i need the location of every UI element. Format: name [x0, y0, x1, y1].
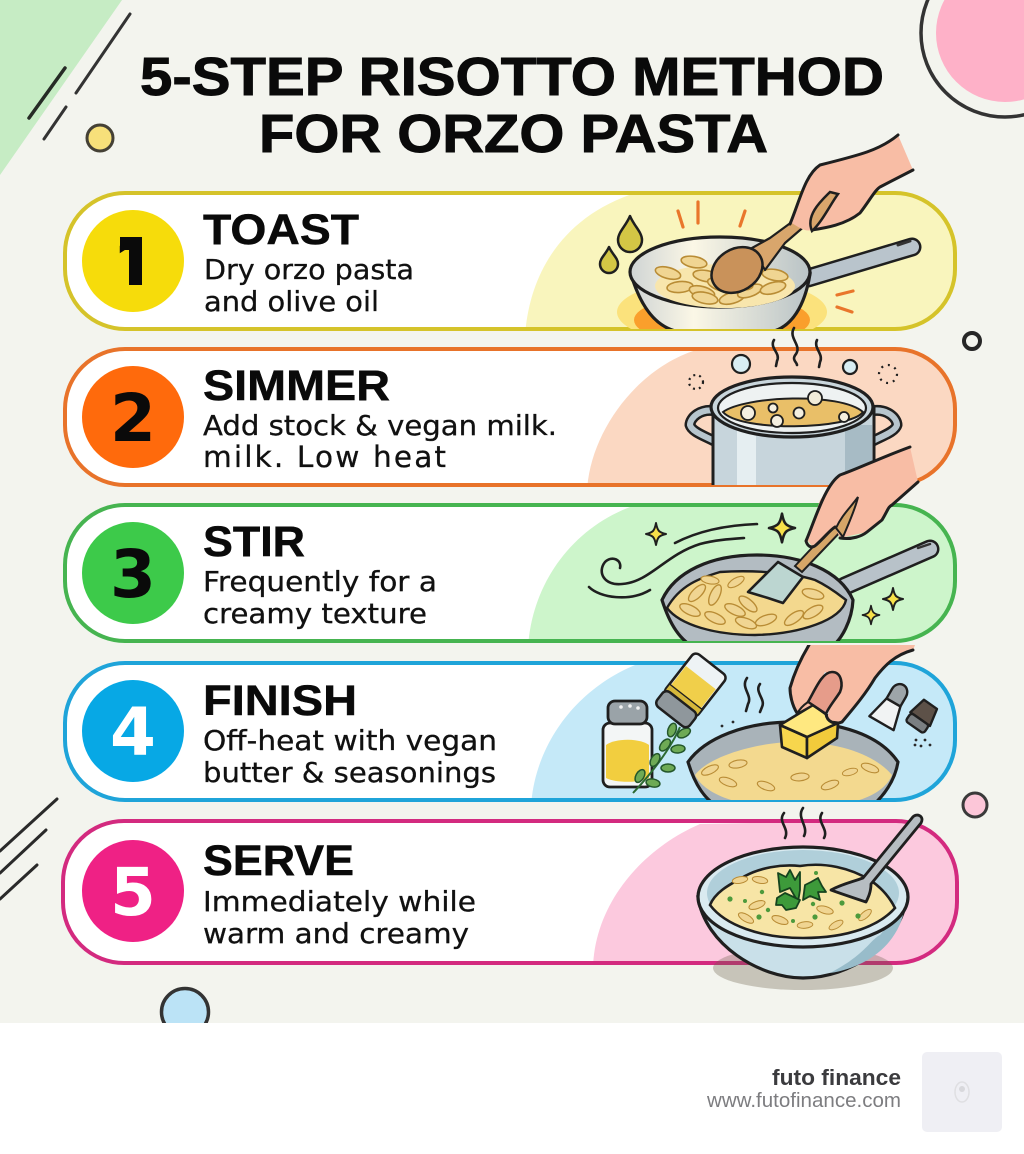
step 3 heading: STIR [203, 518, 305, 566]
icon: creamy orzo [695, 742, 892, 800]
icon: pan [688, 722, 898, 808]
step 5 description: Immediately while [203, 885, 476, 918]
step 2 number [82, 366, 184, 468]
step 3 number: 3 [110, 536, 156, 613]
decoration: bottom blue circle [160, 986, 210, 1023]
step 5 number: 5 [110, 854, 156, 931]
decoration: top-left green triangle and lines [0, 0, 130, 175]
icon: pepper shaker [905, 697, 940, 734]
icon: pan body [631, 274, 810, 332]
icon: pan rim [630, 237, 810, 307]
step 2 description [203, 409, 557, 474]
footer: logo tile [922, 1052, 1002, 1132]
step 1 description [204, 253, 414, 318]
step 3 description [203, 565, 437, 630]
title: FOR ORZO PASTA [259, 104, 768, 164]
panel: step 1 toast [63, 188, 960, 335]
step 4 number: 4 [110, 694, 156, 771]
icon: steam [773, 328, 821, 367]
icon: risotto [710, 865, 895, 938]
icon: hand [790, 645, 915, 723]
footer: brand text: futo finance [772, 1065, 901, 1090]
icon: tilted shaker [654, 651, 728, 729]
icon: oil drops [600, 216, 642, 273]
step 5 description: warm and creamy [203, 917, 469, 950]
icon: seasoning specks [721, 721, 931, 747]
panel: step 4 finish [63, 659, 960, 806]
icon: steam [782, 808, 825, 838]
icon: sparkles [646, 514, 903, 624]
icon: finishing pan with butter, shakers and hand [603, 645, 940, 808]
icon: jar shaker [603, 701, 652, 787]
step 3 description: creamy texture [203, 597, 427, 630]
icon: oil pool with orzo [654, 254, 795, 308]
icon: stirring pan with spatula and hand [589, 447, 930, 648]
footer: brand text [706, 1065, 901, 1112]
icon: flame glow [617, 292, 827, 329]
step 1 description: and olive oil [204, 285, 379, 318]
decoration: small ring [964, 333, 980, 349]
icon: spoon [831, 815, 922, 902]
icon: bowl shadow [713, 946, 893, 990]
step 2 heading: SIMMER [203, 362, 390, 410]
step 1 number: 1 [115, 224, 153, 300]
step 2 number: 2 [110, 380, 156, 457]
step 4 description [203, 724, 497, 789]
step 1 heading: TOAST [203, 206, 359, 254]
step 3 description: Frequently for a [203, 565, 437, 598]
panel: step 2 simmer [63, 345, 960, 491]
icon: pan handle [808, 241, 912, 278]
panel: step 5 serve [63, 819, 960, 967]
title [140, 47, 884, 164]
icon: pan handle [845, 544, 930, 586]
icon: spatula [746, 528, 839, 604]
icon: pan [662, 555, 853, 648]
step 1 description: Dry orzo pasta [204, 253, 414, 286]
step 1 number [82, 210, 184, 312]
icon: hand [806, 447, 918, 547]
icon: pot handles [690, 410, 897, 442]
icon: salt shaker [869, 678, 916, 730]
title: 5-STEP RISOTTO METHOD [140, 47, 884, 107]
icon: creamy orzo [667, 571, 846, 635]
decoration: pink ring [963, 793, 987, 817]
icon: bowl body [698, 897, 907, 978]
step 4 description: butter & seasonings [203, 756, 496, 789]
step 5 heading: SERVE [203, 837, 354, 885]
decoration: top-right pink circle [921, 0, 1024, 117]
icon: bubbles [689, 355, 897, 389]
icon: serving bowl [698, 808, 922, 990]
icon: steam [745, 678, 763, 712]
icon: sprig [633, 722, 692, 793]
step 4 number [82, 680, 184, 782]
icon: butter [780, 705, 838, 758]
icon: wooden spoon [710, 222, 803, 294]
icon: sizzle marks [678, 202, 853, 312]
icon: toast pan with spoon and hand [600, 135, 913, 346]
icon: pot rim and contents [711, 377, 873, 437]
icon: parsley [776, 870, 826, 910]
icon: pot body [713, 407, 874, 490]
icon: simmering pot [689, 328, 897, 490]
icon: bowl rim [698, 847, 908, 947]
step 3 number [82, 522, 184, 624]
step 2 description: Add stock & vegan milk. [203, 409, 557, 442]
icon: motion swirl [589, 524, 757, 597]
panel: step 3 stir [63, 501, 960, 647]
step 2 description: milk. Low heat [203, 440, 446, 474]
decoration: left lines [0, 799, 57, 899]
step 4 heading: FINISH [203, 677, 357, 725]
step 4 description: Off-heat with vegan [203, 724, 497, 757]
icon: hand [790, 135, 913, 231]
step 5 number [82, 840, 184, 942]
footer: brand text: www.futofinance.com [706, 1090, 901, 1112]
step 5 description [203, 885, 476, 950]
